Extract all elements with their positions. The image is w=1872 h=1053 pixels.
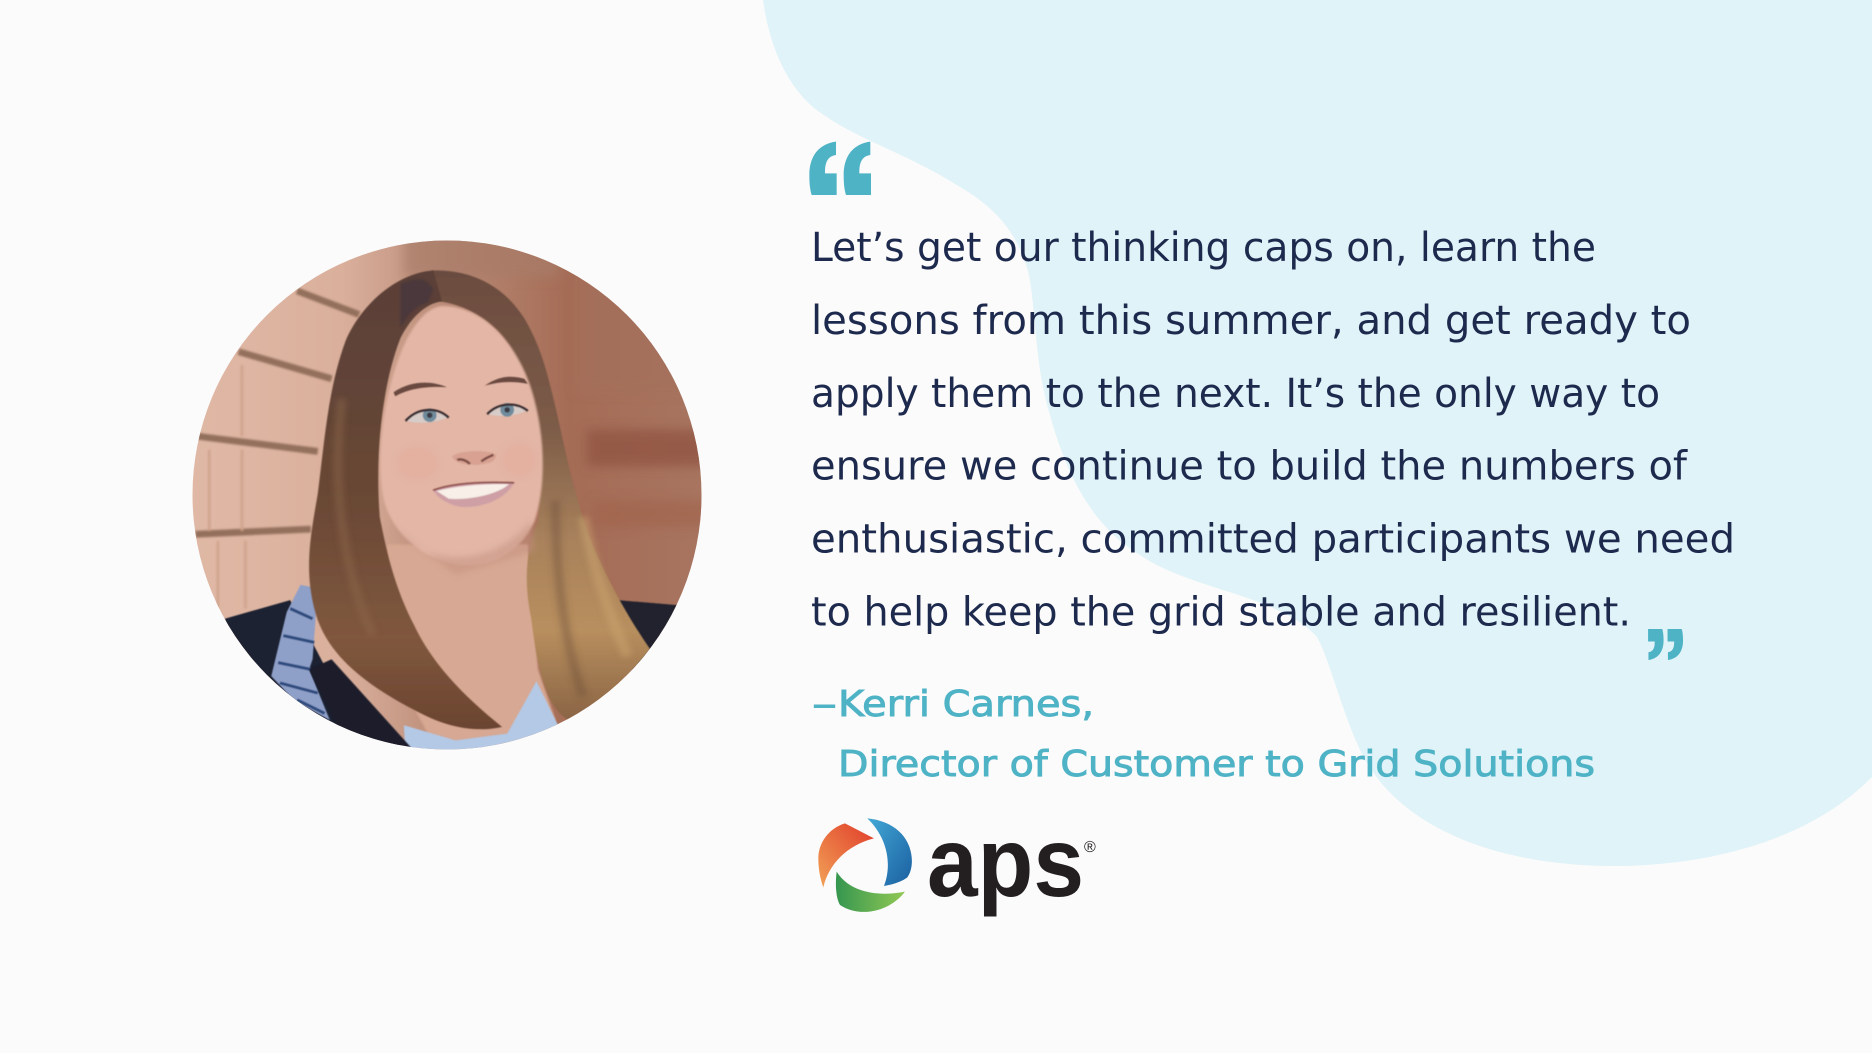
- scarf: [271, 585, 330, 720]
- eyebrows: [394, 377, 528, 396]
- logo mark: [818, 818, 912, 912]
- hair right: [431, 270, 650, 720]
- shirt: [403, 681, 558, 750]
- jacket: [225, 600, 678, 760]
- quote text: enthusiastic, committed participants we need: [811, 516, 1735, 562]
- attribution: Kerri Carnes,: [838, 684, 1094, 725]
- background blob: [763, 0, 1872, 866]
- portrait photo: [180, 230, 720, 760]
- cheek shading: [432, 524, 534, 572]
- hair highlights: [338, 399, 628, 696]
- quote slide: [192, 0, 1872, 916]
- quote text: Let’s get our thinking caps on, learn the: [811, 225, 1596, 271]
- logo wordmark: aps: [927, 807, 1084, 917]
- attribution: –: [812, 684, 837, 725]
- opening quote mark: [809, 142, 871, 195]
- jacket lapel: [308, 658, 412, 747]
- quote text: apply them to the next. It’s the only way to: [811, 371, 1660, 417]
- attribution: Director of Customer to Grid Solutions: [838, 744, 1595, 785]
- brick wall background: [180, 230, 720, 760]
- neck and chest: [387, 544, 555, 760]
- closing quote mark: [1648, 629, 1683, 660]
- aps logo: [818, 807, 1096, 917]
- face: [380, 306, 543, 565]
- nose: [452, 451, 496, 465]
- hair parting shadow: [400, 280, 433, 328]
- quote text: to help keep the grid stable and resilient.: [811, 590, 1631, 636]
- mouth: [433, 482, 514, 507]
- quote text: ensure we continue to build the numbers of: [811, 444, 1688, 490]
- hair left: [309, 271, 502, 729]
- eyes: [406, 403, 528, 423]
- quote text: lessons from this summer, and get ready to: [811, 298, 1691, 344]
- registered mark: ®: [1084, 839, 1096, 856]
- quote text: [811, 225, 1735, 636]
- attribution: [812, 684, 1595, 785]
